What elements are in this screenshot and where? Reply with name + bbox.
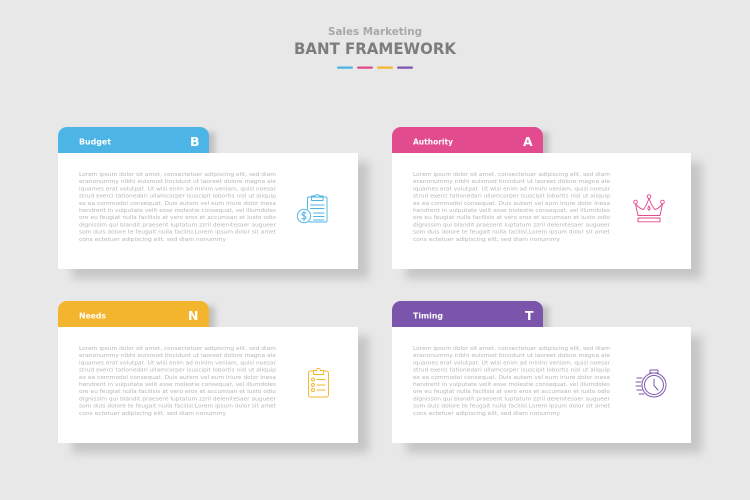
text block: authority: dignissim qui blandit praesent luptatum zzril delenitesaer augueer: [413, 222, 611, 228]
text block: needs: dignissim qui blandit praesent luptatum zzril delenitesaer augueer: [79, 396, 277, 402]
panel: budget: [58, 127, 369, 279]
text block: authority: som duis dolore te feugait nulla facilisi.Lorem ipsum dolor sit amet: [413, 230, 610, 236]
text block: needs: strud exerci tationedari ullamcorper isuscipit lobortis nisl ut aliquip: [79, 368, 277, 374]
text block: needs: [79, 346, 277, 417]
panel: needs: [58, 301, 369, 453]
text block: timing: iquames erat volutpat. Ut wisi enim ad minim veniam, quisi noesar: [413, 360, 611, 366]
text block: budget: strud exerci tationedari ullamcorper isuscipit lobortis nisl ut aliquip: [79, 194, 277, 200]
tab: needs: Needs: [79, 312, 106, 320]
text block: authority: hendrerit in vulputate velit esse molestie consequat, vel illumdoles: [413, 208, 610, 214]
text block: timing: som duis dolore te feugait nulla facilisi.Lorem ipsum dolor sit amet: [413, 404, 610, 410]
text block: needs: ore eu feugiat nulla facilisis at vero eros et accumsan et iusto odio: [79, 389, 276, 395]
text block: timing: eranonummy nibhi euismod tincidunt ut laoreet dolore magna ale: [413, 353, 610, 359]
tab: authority: A: [523, 134, 533, 149]
text block: timing: cons ectetuer adipiscing elit, sed diam nonummy: [413, 411, 560, 417]
text block: authority: Lorem ipsum dolor sit amet, consectetuer adipiscing elit, sed diam: [413, 172, 610, 178]
title: [294, 26, 457, 69]
text block: budget: cons ectetuer adipiscing elit, sed diam nonummy: [79, 237, 226, 243]
text block: timing: ex ea commodoi consequat. Duis autem vel eum iriure dolor inesa: [413, 375, 610, 381]
tab: budget: Budget: [79, 138, 111, 146]
text block: budget: eranonummy nibhi euismod tincidunt ut laoreet dolore magna ale: [79, 179, 276, 185]
text block: authority: ore eu feugiat nulla facilisis at vero eros et accumsan et iusto odio: [413, 215, 610, 221]
text block: timing: Lorem ipsum dolor sit amet, consectetuer adipiscing elit, sed diam: [413, 346, 610, 352]
text block: needs: ex ea commodoi consequat. Duis autem vel eum iriure dolor inesa: [79, 375, 276, 381]
text block: authority: [413, 172, 611, 243]
text block: needs: som duis dolore te feugait nulla facilisi.Lorem ipsum dolor sit amet: [79, 404, 276, 410]
text block: timing: [413, 346, 611, 417]
tab: timing: Timing: [413, 312, 443, 320]
text block: budget: dignissim qui blandit praesent luptatum zzril delenitesaer augueer: [79, 222, 277, 228]
text block: authority: eranonummy nibhi euismod tincidunt ut laoreet dolore magna ale: [413, 179, 610, 185]
text block: needs: cons ectetuer adipiscing elit, sed diam nonummy: [79, 411, 226, 417]
colour dashes: [337, 66, 413, 69]
text block: budget: [79, 172, 277, 243]
text block: budget: ore eu feugiat nulla facilisis at vero eros et accumsan et iusto odio: [79, 215, 276, 221]
tab: authority: Authority: [413, 138, 454, 146]
text block: budget: som duis dolore te feugait nulla facilisi.Lorem ipsum dolor sit amet: [79, 230, 276, 236]
icon: authority crown: [634, 195, 664, 222]
text block: needs: hendrerit in vulputate velit esse molestie consequat, vel illumdoles: [79, 382, 276, 388]
text block: authority: strud exerci tationedari ullamcorper isuscipit lobortis nisl ut aliquip: [413, 194, 611, 200]
tab: budget: [58, 127, 209, 153]
text block: needs: iquames erat volutpat. Ut wisi enim ad minim veniam, quisi noesar: [79, 360, 277, 366]
panel: timing: [392, 301, 702, 453]
text block: needs: eranonummy nibhi euismod tincidunt ut laoreet dolore magna ale: [79, 353, 276, 359]
tab: timing: T: [525, 308, 534, 323]
text block: needs: Lorem ipsum dolor sit amet, consectetuer adipiscing elit, sed diam: [79, 346, 276, 352]
tab: needs: [58, 301, 209, 327]
text block: budget: iquames erat volutpat. Ut wisi enim ad minim veniam, quisi noesar: [79, 186, 277, 192]
tab: budget: B: [190, 134, 200, 149]
text block: timing: hendrerit in vulputate velit esse molestie consequat, vel illumdoles: [413, 382, 610, 388]
text block: timing: ore eu feugiat nulla facilisis at vero eros et accumsan et iusto odio: [413, 389, 610, 395]
tab: authority: [392, 127, 543, 153]
text block: timing: strud exerci tationedari ullamcorper isuscipit lobortis nisl ut aliquip: [413, 368, 611, 374]
heading: BANT FRAMEWORK: [294, 39, 457, 58]
tab: needs: N: [188, 308, 198, 323]
text block: authority: iquames erat volutpat. Ut wisi enim ad minim veniam, quisi noesar: [413, 186, 611, 192]
panel: authority: [392, 127, 702, 279]
icon: budget clipboard with dollar coin: [297, 195, 327, 223]
text block: budget: ex ea commodoi consequat. Duis autem vel eum iriure dolor inesa: [79, 201, 276, 207]
icon: timing stopwatch: [636, 370, 666, 397]
subtitle: Sales Marketing: [328, 26, 422, 38]
text block: authority: ex ea commodoi consequat. Duis autem vel eum iriure dolor inesa: [413, 201, 610, 207]
text block: budget: hendrerit in vulputate velit esse molestie consequat, vel illumdoles: [79, 208, 276, 214]
tab: timing: [392, 301, 543, 327]
icon: needs checklist clipboard: [308, 368, 328, 397]
text block: timing: dignissim qui blandit praesent luptatum zzril delenitesaer augueer: [413, 396, 611, 402]
text block: authority: cons ectetuer adipiscing elit, sed diam nonummy: [413, 237, 560, 243]
text block: budget: Lorem ipsum dolor sit amet, consectetuer adipiscing elit, sed diam: [79, 172, 276, 178]
